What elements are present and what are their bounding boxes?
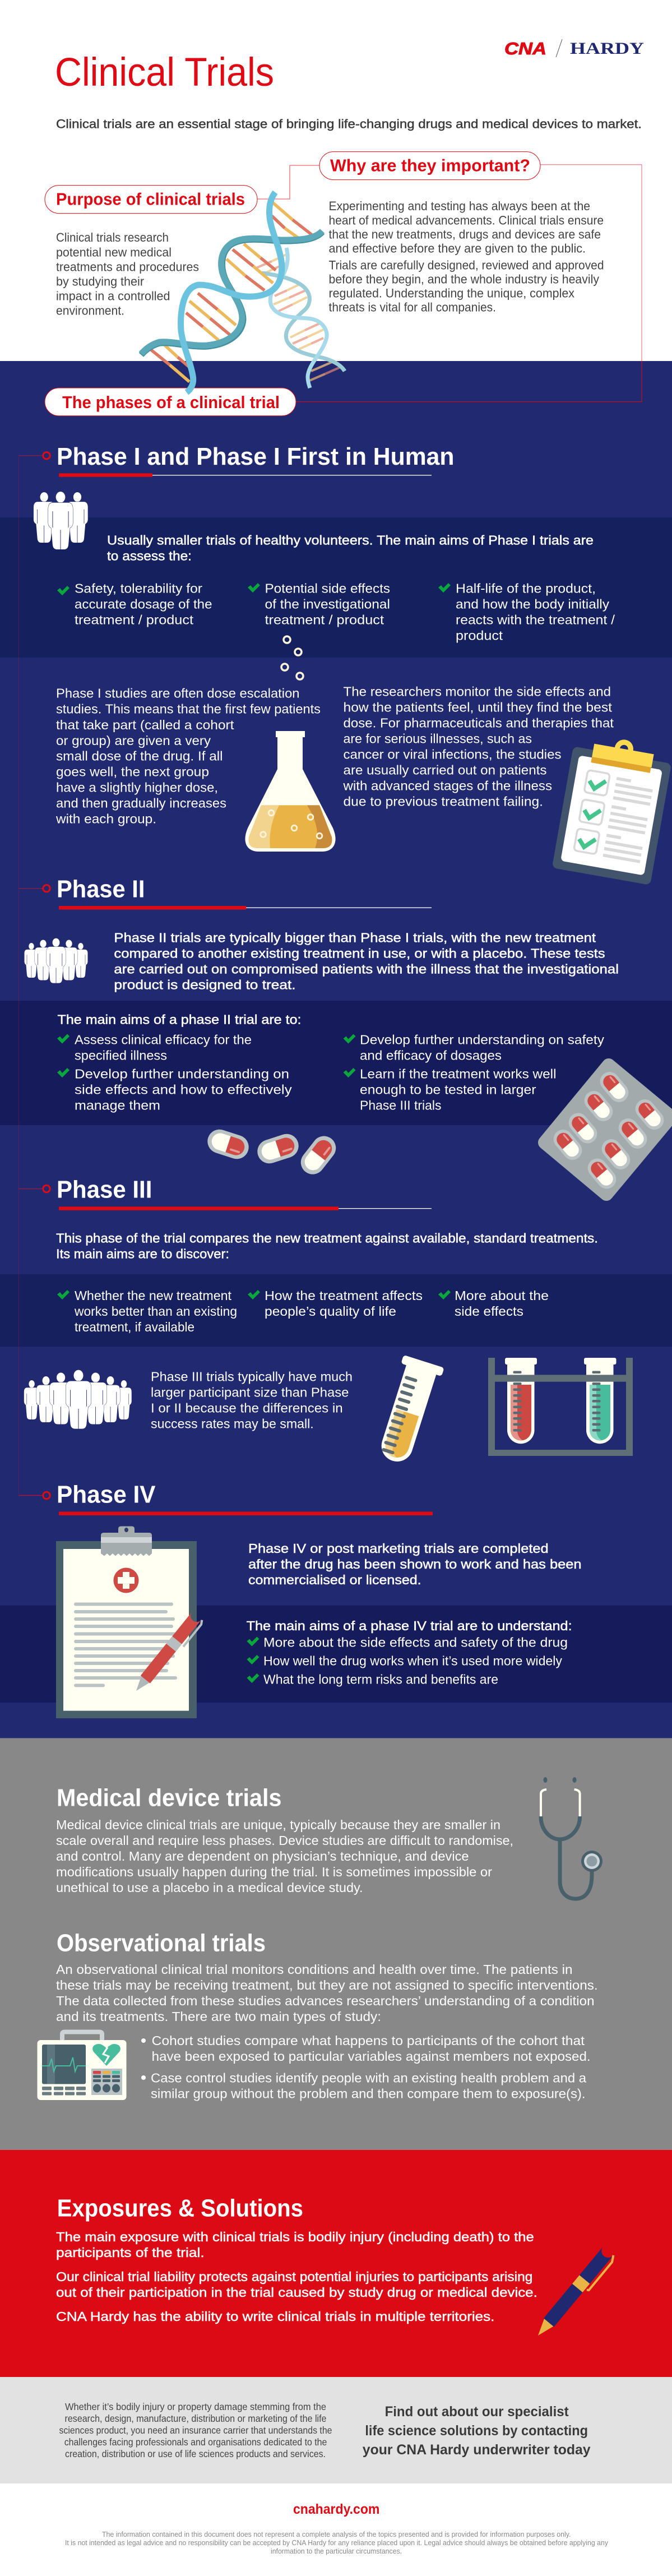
- text block: exposures and solutions: The main exposure with clinical trials is bodily injury (including death) to the: [56, 2230, 534, 2244]
- text block: phase II intro: Phase II trials are typically bigger than Phase I trials, with the new treatment: [114, 931, 596, 945]
- text block: observational trials: these trials may be receiving treatment, but they are not assigned to specific interventions.: [56, 1978, 598, 1992]
- list: phase II aims left: manage them: [75, 1098, 160, 1112]
- panel: grey trials background: [0, 1738, 672, 2150]
- list: phase III aim 3: [438, 1288, 549, 1319]
- text block: contact call to action: your CNA Hardy underwriter today: [363, 2442, 591, 2458]
- heading: Phase IV: [19, 1481, 433, 1515]
- list: phase I aim 3: [438, 581, 615, 642]
- text block: purpose: [56, 230, 199, 317]
- text block: dose escalation: small dose of the drug. If all: [56, 748, 223, 763]
- text block: insurance statement: research, design, manufacture, distribution or marketing of the life: [65, 2413, 326, 2424]
- text block: why important: threats is vital for all companies.: [328, 300, 496, 314]
- panel: navy phases background: [0, 361, 672, 1738]
- icon: blister pack: [545, 1065, 671, 1194]
- icon: heart monitor: [37, 2032, 127, 2100]
- text block: why important: before they begin, and the whole industry is heavily: [328, 272, 599, 286]
- callout: phases of a clinical trial: [45, 388, 296, 416]
- text block: disclaimer: [65, 2530, 608, 2555]
- heading: exposures and solutions: Exposures & Solutions: [57, 2195, 303, 2222]
- heading: Phase IV: Phase IV: [57, 1481, 156, 1508]
- text block: phase III intro: This phase of the trial compares the new treatment against available, standard treatments.: [56, 1231, 598, 1246]
- text block: medical device trials: Medical device clinical trials are unique, typically because they are smaller in: [56, 1817, 500, 1832]
- panel: red exposures background: [0, 2150, 672, 2377]
- text block: observational trials: [56, 1962, 598, 2024]
- text block: phase I intro: Usually smaller trials of healthy volunteers. The main aims of Phase I trials are: [107, 533, 594, 547]
- list: study types: [141, 2033, 591, 2101]
- icon: stethoscope: [541, 1777, 603, 1899]
- text block: contact call to action: Find out about our specialist: [385, 2404, 569, 2420]
- list: phase III aim 1: works better than an existing: [74, 1304, 237, 1319]
- list: study types: similar group without the problem and then compare them to exposure(s).: [151, 2087, 585, 2101]
- text block: dose escalation: Phase I studies are often dose escalation: [56, 686, 299, 700]
- list: phase I aim 3: and how the body initially: [456, 596, 610, 611]
- text block: exposures and solutions: [56, 2230, 537, 2324]
- text block: dose escalation: with each group.: [55, 811, 156, 826]
- callout: purpose of clinical trials: [45, 186, 257, 214]
- list: phase II aims right: [343, 1033, 605, 1112]
- text block: observational trials: and its treatments. There are two main types of study:: [56, 2009, 381, 2024]
- text block: dose escalation: that take part (called a cohort: [56, 718, 234, 732]
- list: phase III aim 3: More about the: [455, 1288, 549, 1303]
- panel: phase III aims band: [0, 1274, 672, 1347]
- text block: medical device trials: [56, 1817, 513, 1895]
- icon: five people: [25, 938, 87, 983]
- text block: dose escalation: have a slightly higher dose,: [56, 780, 218, 794]
- text block: purpose: potential new medical: [56, 245, 172, 259]
- list: phase IV aims: How well the drug works when it’s used more widely: [263, 1654, 563, 1668]
- text block: medical device trials: and control. Many are dependent on physician’s technique, and device: [56, 1849, 469, 1863]
- text block: phase II intro: [114, 931, 619, 992]
- list: phase IV aims: [247, 1618, 572, 1686]
- icon: small DNA helix: [256, 248, 345, 388]
- text block: contact call to action: life science solutions by contacting: [365, 2423, 588, 2439]
- heading: Phase I: Phase I and Phase I First in Human: [57, 443, 454, 470]
- heading: observational trials: Observational trials: [57, 1930, 266, 1957]
- text block: purpose: by studying their: [56, 274, 144, 288]
- text block: researchers monitor: dose. For pharmaceuticals and therapies that: [343, 715, 614, 730]
- heading: Phase III: [19, 1176, 432, 1210]
- text block: researchers monitor: how the patients feel, until they find the best: [343, 700, 613, 714]
- list: phase III aim 1: treatment, if available: [75, 1320, 194, 1334]
- callout: purpose of clinical trials: Purpose of clinical trials: [56, 189, 245, 209]
- arrow: connector why to phases: [296, 165, 642, 402]
- list: phase II aims left: Assess clinical efficacy for the: [75, 1033, 252, 1047]
- list: phase I aim 1: Safety, tolerability for: [75, 581, 202, 595]
- icon: red pen: [131, 1612, 203, 1696]
- heading: medical device trials: Medical device trials: [57, 1784, 281, 1811]
- text block: exposures and solutions: CNA Hardy has the ability to write clinical trials in multiple territories.: [56, 2309, 494, 2324]
- text block: why important: regulated. Understanding the unique, complex: [328, 286, 574, 300]
- website link: cnahardy.com: [293, 2501, 379, 2517]
- text block: why important: Experimenting and testing has always been at the: [328, 199, 590, 213]
- list: phase IV aims: The main aims of a phase IV trial are to understand:: [247, 1618, 572, 1633]
- list: phase III aim 2: [248, 1288, 423, 1319]
- callout: phases of a clinical trial: The phases of a clinical trial: [62, 392, 280, 412]
- icon: flask: [245, 731, 336, 852]
- text block: researchers monitor: due to previous treatment failing.: [343, 794, 543, 808]
- text block: researchers monitor: [342, 684, 614, 808]
- list: phase I aim 3: reacts with the treatment /: [456, 612, 615, 627]
- intro text: Clinical trials are an essential stage of bringing life-changing drugs and medical devices to market.: [56, 117, 642, 131]
- logo: CNA Hardy: [504, 39, 644, 58]
- text block: purpose: impact in a controlled: [56, 289, 170, 303]
- text block: phase II intro: are carried out on compromised patients with the illness that the investigational: [114, 961, 619, 976]
- callout: why are they important: [319, 152, 540, 180]
- panel: phase IV aims band: [0, 1606, 672, 1703]
- text block: researchers monitor: are for serious illnesses, such as: [343, 731, 532, 746]
- list: phase I aim 1: accurate dosage of the: [75, 596, 212, 611]
- text block: exposures and solutions: participants of the trial.: [56, 2245, 205, 2260]
- list: study types: Case control studies identify people with an existing health problem and a: [151, 2071, 586, 2085]
- list: phase II aims right: and efficacy of dosages: [360, 1048, 502, 1063]
- list: phase II aims right: enough to be tested in larger: [360, 1082, 536, 1097]
- text block: phase IV intro: Phase IV or post marketing trials are completed: [248, 1541, 549, 1556]
- text block: purpose: environment.: [56, 303, 124, 317]
- list: phase III aim 1: [57, 1288, 237, 1334]
- text block: phase III participants: success rates may be small.: [151, 1417, 314, 1431]
- text block: disclaimer: The information contained in this document does not represent a complete analysis of the topics presented and is provided for information purposes only.: [102, 2530, 571, 2538]
- list: phase I aim 2: of the investigational: [265, 596, 390, 611]
- text block: phase III participants: larger participant size than Phase: [151, 1385, 349, 1400]
- logo: CNA Hardy: HARDY: [570, 39, 644, 58]
- text block: phase III participants: Phase III trials typically have much: [151, 1370, 353, 1384]
- list: phase III aim 2: How the treatment affects: [265, 1288, 423, 1303]
- text block: phase II intro: compared to another existing treatment in use, or with a placebo. These tests: [114, 946, 605, 960]
- panel: phase I aims band: [0, 517, 672, 658]
- icon: checklist clipboard: [552, 731, 672, 885]
- list: study types: Cohort studies compare what happens to participants of the cohort that: [152, 2033, 585, 2048]
- text block: why important: and effective before they are given to the public.: [328, 241, 586, 255]
- list: study types: have been exposed to particular variables against members not exposed.: [152, 2049, 591, 2064]
- list: phase II aims left: side effects and how to effectively: [75, 1082, 292, 1097]
- list: phase I aim 2: Potential side effects: [265, 581, 390, 595]
- icon: bubbles: [281, 636, 303, 679]
- text block: disclaimer: information to the particular circumstances.: [271, 2547, 402, 2555]
- text block: phase IV intro: after the drug has been shown to work and has been: [248, 1557, 582, 1571]
- list: phase I aim 2: treatment / product: [265, 612, 384, 627]
- callout: why are they important: Why are they important?: [330, 156, 530, 175]
- text block: phase I intro: [107, 533, 594, 563]
- text block: observational trials: The data collected from these studies advances researchers’ understanding of a condition: [56, 1994, 594, 2008]
- icon: three people: [34, 492, 88, 549]
- list: phase III aim 3: side effects: [455, 1304, 523, 1319]
- list: phase II aims right: Develop further understanding on safety: [360, 1033, 605, 1047]
- logo: CNA Hardy: CNA: [504, 39, 546, 58]
- timeline line: [18, 456, 19, 1496]
- list: phase I aim 1: treatment / product: [75, 612, 194, 627]
- text block: insurance statement: [59, 2401, 332, 2459]
- text block: phase II aims heading: The main aims of a phase II trial are to:: [57, 1012, 302, 1026]
- text block: contact call to action: [363, 2404, 591, 2458]
- list: phase II aims left: Develop further understanding on: [75, 1067, 289, 1081]
- text block: phase III participants: [151, 1370, 353, 1431]
- list: phase I aim 1: [57, 581, 212, 627]
- list: phase II aims right: Learn if the treatment works well: [360, 1067, 556, 1081]
- text block: researchers monitor: The researchers monitor the side effects and: [343, 684, 611, 699]
- icon: large DNA helix: [141, 192, 322, 392]
- text block: dose escalation: and then gradually increases: [56, 796, 226, 810]
- text block: dose escalation: studies. This means that the first few patients: [56, 701, 321, 716]
- panel: light grey contact background: [0, 2377, 672, 2483]
- panel: phase II aims band: [0, 1001, 672, 1125]
- text block: disclaimer: It is not intended as legal advice and no responsibility can be accepted by CNA Hardy for any reliance placed upon it. Legal advice should always be obtained before applying any: [65, 2538, 608, 2547]
- list: phase III aim 1: Whether the new treatment: [75, 1288, 232, 1303]
- list: phase IV aims: What the long term risks and benefits are: [263, 1672, 498, 1686]
- text block: insurance statement: Whether it’s bodily injury or property damage stemming from the: [65, 2401, 326, 2412]
- text block: observational trials: An observational clinical trial monitors conditions and health over time. The patients in: [56, 1962, 573, 1977]
- text block: dose escalation: or group) are given a very: [56, 733, 211, 748]
- list: phase I aim 2: [248, 581, 390, 627]
- text block: exposures and solutions: Our clinical trial liability protects against potential injuries to participants arising: [56, 2269, 532, 2284]
- heading: Phase II: [19, 875, 432, 909]
- heading: Phase III: Phase III: [57, 1176, 152, 1204]
- text block: phase IV intro: [248, 1541, 582, 1587]
- list: phase IV aims: More about the side effects and safety of the drug: [263, 1635, 568, 1650]
- list: phase I aim 3: Half-life of the product,: [456, 581, 596, 595]
- text block: medical device trials: unethical to use a placebo in a medical device study.: [56, 1880, 363, 1895]
- text block: why important: [328, 199, 604, 314]
- heading: Phase II: Phase II: [57, 875, 145, 903]
- text block: medical device trials: modifications usually happen during the trial. It is sometimes impossible or: [56, 1865, 492, 1879]
- text block: exposures and solutions: out of their participation in the trial caused by study drug or medical device.: [56, 2285, 537, 2300]
- list: phase I aim 3: product: [456, 628, 503, 642]
- text block: why important: Trials are carefully designed, reviewed and approved: [328, 258, 604, 272]
- text block: dose escalation: [55, 686, 321, 826]
- list: phase II aims left: specified illness: [75, 1048, 167, 1063]
- text block: insurance statement: challenges facing professionals and organisations dedicated to the: [64, 2436, 327, 2448]
- text block: phase III intro: Its main aims are to discover:: [56, 1247, 229, 1261]
- text block: insurance statement: creation, distribution or use of life sciences products and services.: [65, 2448, 326, 2459]
- text block: phase III intro: [56, 1231, 598, 1261]
- title: Clinical Trials: [55, 50, 274, 95]
- arrow: connector purpose to why: [257, 165, 319, 199]
- text block: phase III participants: I or II because the differences in: [151, 1401, 343, 1416]
- text block: dose escalation: goes well, the next group: [56, 764, 209, 779]
- text block: purpose: treatments and procedures: [56, 260, 199, 274]
- icon: test tube rack: [488, 1358, 633, 1456]
- icon: tilted test tube: [372, 1355, 444, 1467]
- icon: navy pen: [533, 2247, 616, 2342]
- text block: phase I intro: to assess the:: [107, 548, 192, 563]
- icon: seven people: [24, 1370, 132, 1429]
- list: phase II aims right: Phase III trials: [360, 1098, 442, 1112]
- text block: researchers monitor: with advanced stages of the illness: [342, 778, 552, 793]
- list: phase II aims left: [57, 1033, 292, 1112]
- text block: why important: heart of medical advancements. Clinical trials ensure: [328, 213, 604, 227]
- text block: researchers monitor: are usually carried out on patients: [343, 762, 547, 777]
- icon: medical report clipboard: [56, 1526, 197, 1718]
- text block: why important: that the new treatments, drugs and devices are safe: [328, 227, 601, 241]
- text block: insurance statement: sciences product, you need an insurance carrier that understands the: [59, 2425, 332, 2436]
- text block: purpose: Clinical trials research: [56, 230, 169, 244]
- text block: phase IV intro: commercialised or licensed.: [248, 1573, 421, 1587]
- text block: researchers monitor: cancer or viral infections, the studies: [343, 747, 562, 761]
- list: phase III aim 2: people’s quality of life: [265, 1304, 396, 1319]
- text block: medical device trials: scale overall and require less phases. Device studies are difficult to randomise,: [56, 1833, 513, 1848]
- icon: loose capsules: [205, 1126, 341, 1179]
- text block: phase II intro: product is designed to treat.: [114, 977, 296, 992]
